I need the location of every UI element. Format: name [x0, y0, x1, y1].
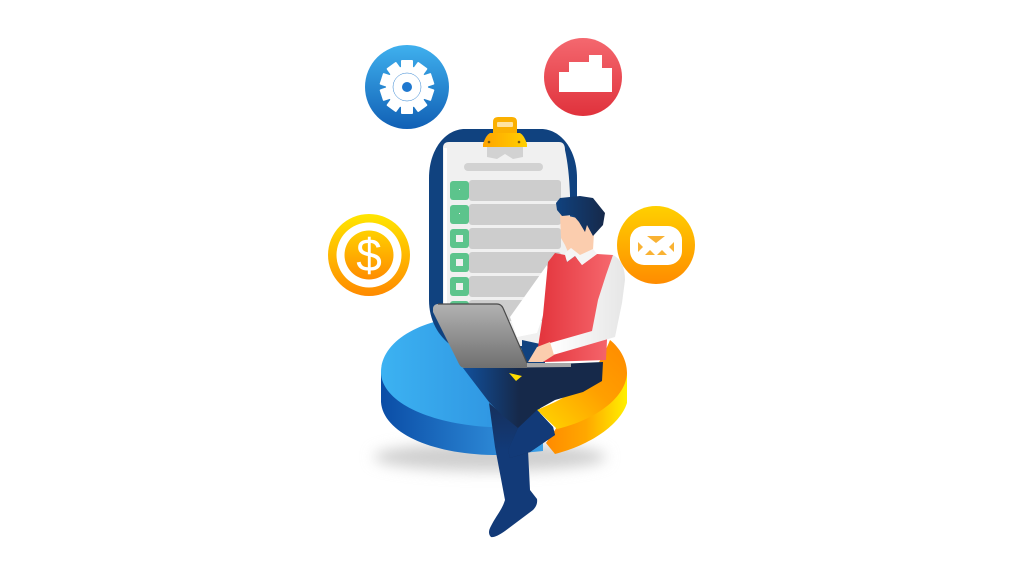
crease marker [509, 373, 522, 381]
front thigh [463, 362, 603, 458]
icon: dollar coin: $ [356, 229, 382, 281]
icon: envelope [617, 206, 695, 284]
person [463, 196, 625, 537]
clipboard clip [483, 117, 527, 147]
hand [528, 342, 554, 362]
neck and face [560, 214, 594, 260]
clipboard title bar [464, 163, 543, 171]
torso lower shirt [522, 340, 545, 368]
ground shadow [374, 443, 606, 471]
back leg [489, 403, 537, 537]
right sleeve [550, 255, 625, 355]
clipboard backing [429, 129, 577, 350]
icon: dollar coin [328, 214, 410, 296]
icon: red stairs [544, 38, 622, 116]
left arm [510, 265, 552, 337]
pie chart: orange section [537, 340, 627, 454]
vest [538, 253, 613, 362]
clipboard [429, 117, 577, 350]
clipboard paper [443, 142, 570, 346]
laptop [433, 304, 571, 368]
icon: gear [365, 45, 449, 129]
pie chart: blue section [381, 317, 543, 455]
checklist rows [450, 180, 561, 321]
knee and shin highlight [508, 410, 555, 458]
hair [556, 196, 605, 236]
clip shadow [487, 147, 523, 159]
collar [565, 248, 597, 265]
